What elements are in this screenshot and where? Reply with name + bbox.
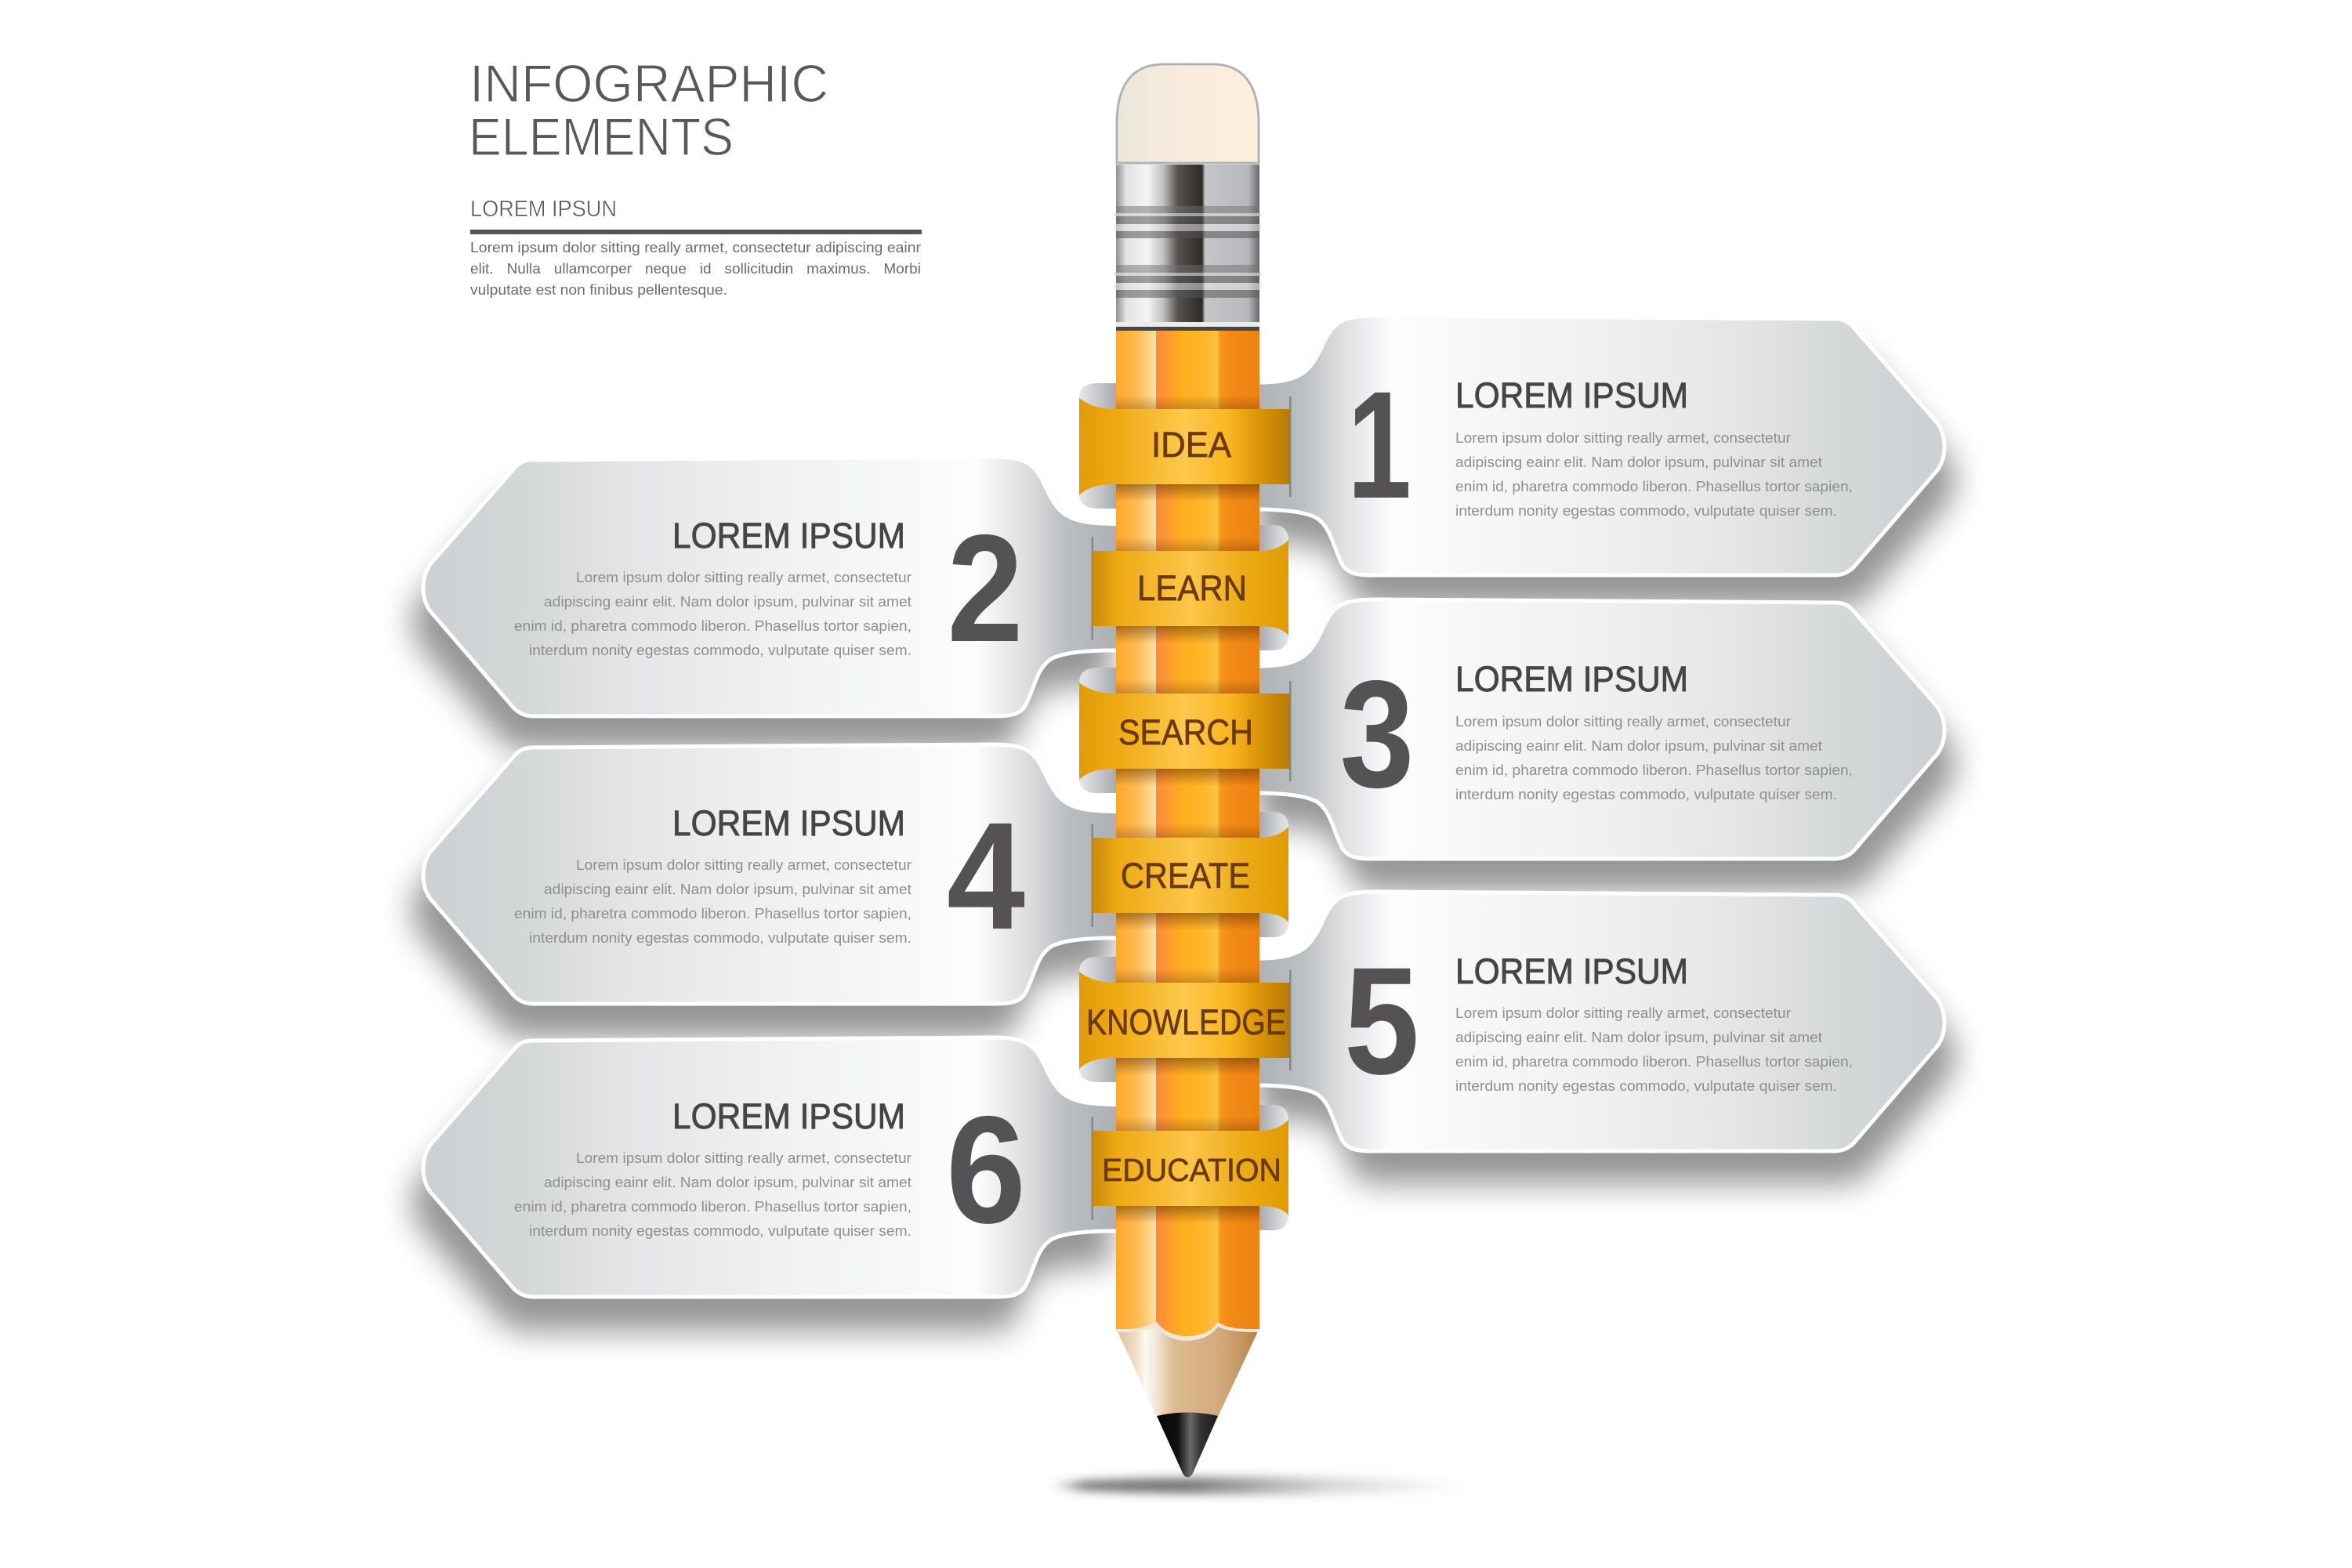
icon: pencil <box>1114 64 1261 1477</box>
intro paragraph: Lorem ipsum dolor sitting really armet, consectetur adipiscing eainr <box>470 240 921 255</box>
panel: card 5: Lorem ipsum dolor sitting really armet, consectetur <box>1455 1005 1791 1021</box>
panel: card 4: interdum nonity egestas commodo, vulputate quiser sem. <box>529 929 911 946</box>
panel: card 6: adipiscing eainr elit. Nam dolor ipsum, pulvinar sit amet <box>544 1174 911 1190</box>
pencil ferrule <box>1114 165 1261 331</box>
pencil body right facet <box>1218 331 1259 1329</box>
panel: card 2: 2 <box>947 503 1024 674</box>
panel: card 1: interdum nonity egestas commodo, vulputate quiser sem. <box>1455 502 1837 519</box>
heading rule <box>470 230 922 234</box>
pencil body left facet <box>1116 331 1157 1329</box>
panel: card 1: Lorem ipsum dolor sitting really armet, consectetur <box>1455 429 1791 446</box>
ribbon: create <box>1091 824 1288 927</box>
subheading: LOREM IPSUN <box>470 197 617 222</box>
ribbon: learn <box>1091 537 1288 640</box>
panel: card 6 <box>423 1037 1122 1297</box>
ribbon: learn: LEARN <box>1137 568 1247 608</box>
intro paragraph: elit. Nulla ullamcorper neque id sollicitudin maximus. Morbi <box>470 261 921 277</box>
panel: card 4: Lorem ipsum dolor sitting really armet, consectetur <box>576 856 911 873</box>
panel: card 1: enim id, pharetra commodo liberon. Phasellus tortor sapien, <box>1455 478 1853 494</box>
panel: card 5: enim id, pharetra commodo liberon. Phasellus tortor sapien, <box>1455 1053 1853 1070</box>
panel: card 6: 6 <box>946 1085 1026 1255</box>
panel: card 5 <box>1246 892 1944 1151</box>
panel: card 3 <box>1246 599 1944 859</box>
panel: card 6: LOREM IPSUM <box>672 1096 905 1136</box>
panel: card 1: 1 <box>1347 360 1412 531</box>
title: ELEMENTS <box>469 107 734 167</box>
panel: card 3: Lorem ipsum dolor sitting really armet, consectetur <box>1455 713 1791 730</box>
panel: card 4: adipiscing eainr elit. Nam dolor ipsum, pulvinar sit amet <box>544 881 911 897</box>
ribbon: create: CREATE <box>1121 856 1250 896</box>
panel: card 6: enim id, pharetra commodo liberon. Phasellus tortor sapien, <box>514 1198 911 1215</box>
ribbon: idea: IDEA <box>1151 425 1231 465</box>
panel: card 2: adipiscing eainr elit. Nam dolor ipsum, pulvinar sit amet <box>544 593 911 610</box>
intro paragraph: vulputate est non finibus pellentesque. <box>470 282 727 298</box>
panel: card 6: interdum nonity egestas commodo, vulputate quiser sem. <box>529 1222 911 1239</box>
pencil wood tip <box>1117 1324 1259 1417</box>
title: INFOGRAPHIC <box>469 54 828 114</box>
panel: card 3: LOREM IPSUM <box>1455 659 1688 699</box>
panel: card 2: enim id, pharetra commodo liberon. Phasellus tortor sapien, <box>514 617 911 634</box>
ground shadow <box>1050 1477 1473 1494</box>
panel: card 5: interdum nonity egestas commodo, vulputate quiser sem. <box>1455 1077 1837 1094</box>
panel: card 6: Lorem ipsum dolor sitting really armet, consectetur <box>576 1150 911 1166</box>
panel: card 3: enim id, pharetra commodo liberon. Phasellus tortor sapien, <box>1455 762 1853 778</box>
panel: card 4: 4 <box>947 791 1025 961</box>
panel: card 3: interdum nonity egestas commodo, vulputate quiser sem. <box>1455 786 1837 802</box>
ribbon: knowledge <box>1079 970 1292 1070</box>
ribbon: education: EDUCATION <box>1102 1152 1281 1188</box>
pencil eraser <box>1117 64 1259 163</box>
panel: card 5: 5 <box>1344 936 1419 1106</box>
title <box>469 54 828 167</box>
card shadows <box>412 349 1955 1331</box>
panel: card 4 <box>423 744 1122 1004</box>
ribbon: search: SEARCH <box>1118 712 1253 752</box>
panel: card 2: LOREM IPSUM <box>672 516 905 556</box>
panel: card 2: Lorem ipsum dolor sitting really armet, consectetur <box>576 569 911 585</box>
panel: card 3: 3 <box>1340 649 1414 820</box>
panel: card 1: LOREM IPSUM <box>1455 375 1688 415</box>
panel: card 1 <box>1246 316 1944 575</box>
pencil scalloped edge highlight <box>1116 1321 1259 1341</box>
ribbon: idea <box>1079 397 1292 497</box>
panel: card 4: LOREM IPSUM <box>672 803 905 843</box>
ribbon shadows on pencil <box>1116 395 1259 1223</box>
panel: card 1: adipiscing eainr elit. Nam dolor ipsum, pulvinar sit amet <box>1455 454 1822 470</box>
ribbon: search <box>1079 681 1292 781</box>
ribbon: knowledge: KNOWLEDGE <box>1086 1002 1286 1042</box>
ribbon curls behind pencil <box>1079 383 1288 1230</box>
ribbon: education <box>1091 1117 1288 1220</box>
pencil lead <box>1157 1412 1218 1477</box>
intro paragraph <box>470 240 921 298</box>
panel: card 3: adipiscing eainr elit. Nam dolor ipsum, pulvinar sit amet <box>1455 737 1822 754</box>
panel: card 2: interdum nonity egestas commodo, vulputate quiser sem. <box>529 642 911 658</box>
panel: card 2 <box>423 457 1122 716</box>
panel: card 5: adipiscing eainr elit. Nam dolor ipsum, pulvinar sit amet <box>1455 1029 1822 1045</box>
panel: card 4: enim id, pharetra commodo liberon. Phasellus tortor sapien, <box>514 905 911 922</box>
panel: card 5: LOREM IPSUM <box>1455 951 1688 991</box>
pencil body centre facet <box>1156 331 1220 1336</box>
